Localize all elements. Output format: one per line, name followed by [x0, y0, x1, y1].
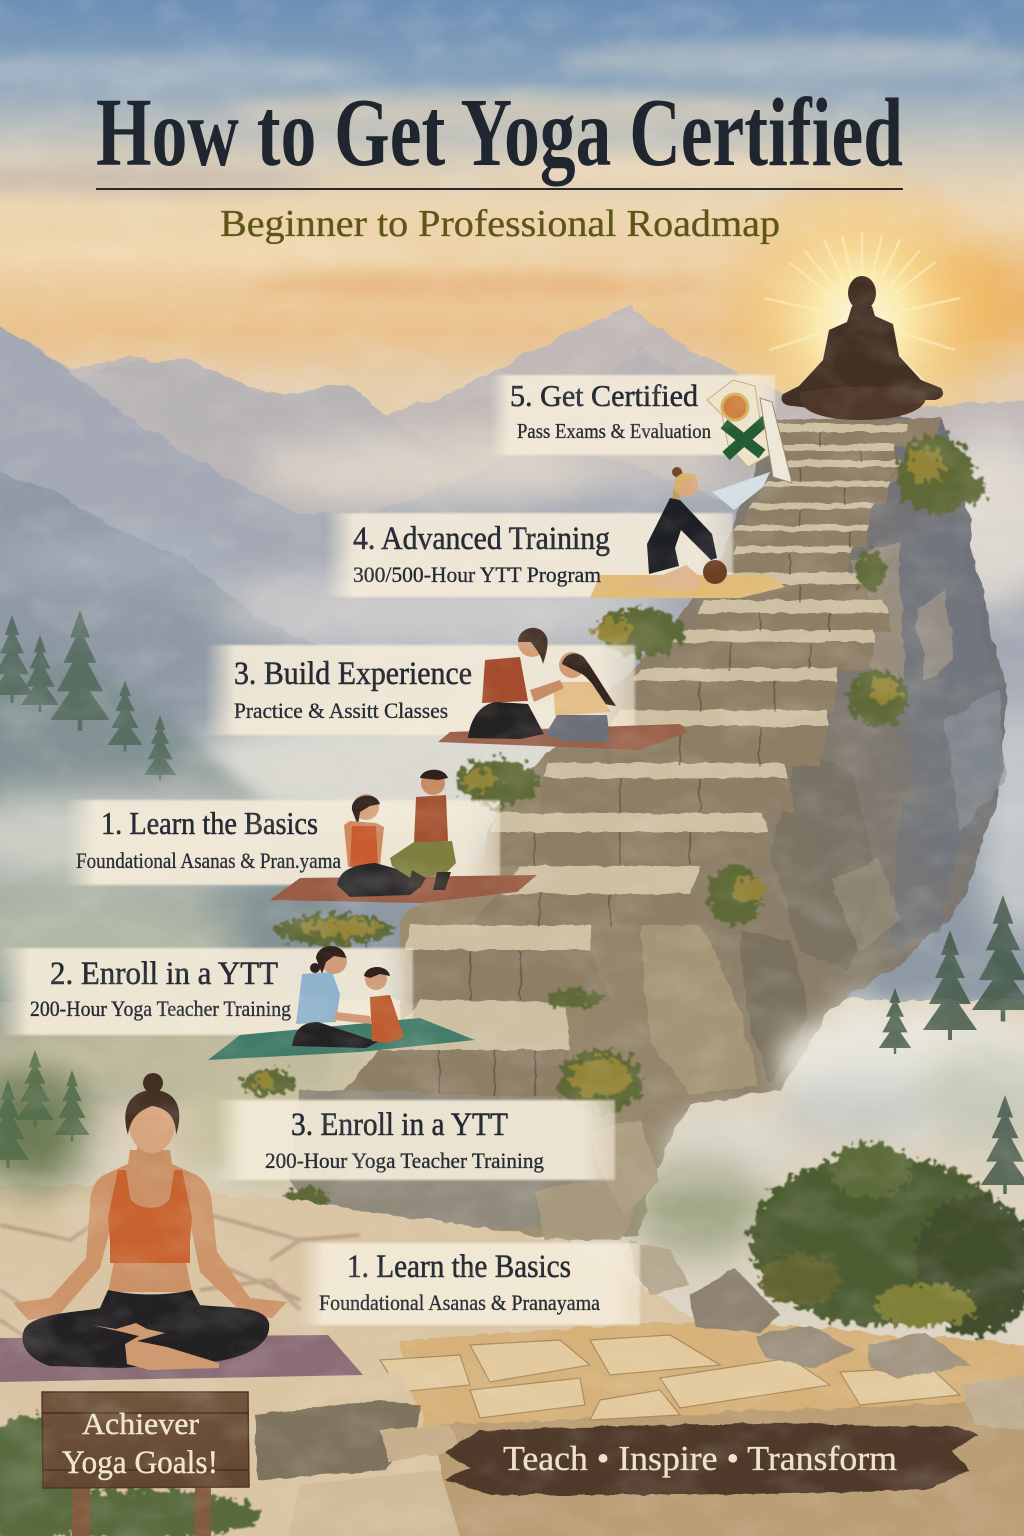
- legs: [22, 1290, 269, 1368]
- shrubs on stairs: [240, 435, 986, 1208]
- cliff: [300, 418, 1008, 1235]
- step 3 banner: [205, 628, 688, 750]
- step 4 banner: 300/500-Hour YTT Program: [353, 562, 601, 587]
- arms: [13, 1172, 287, 1320]
- step 2 banner: [0, 946, 475, 1060]
- sun glow: [702, 160, 1022, 480]
- wooden sign: Achiever: [82, 1406, 200, 1441]
- step 1 upper banner: 1. Learn the Basics: [101, 805, 318, 841]
- step 2 banner: 200-Hour Yoga Teacher Training: [30, 996, 291, 1021]
- cliff rock facets: [640, 520, 1005, 1095]
- step 2 banner: 2. Enroll in a YTT: [50, 956, 278, 992]
- step 3 banner: Practice & Assitt Classes: [234, 698, 448, 723]
- brush banner: [445, 1423, 978, 1495]
- wooden sign: Yoga Goals!: [62, 1445, 218, 1481]
- subtitle: Beginner to Professional Roadmap: [220, 203, 780, 245]
- step 5 banner: Pass Exams & Evaluation: [517, 419, 711, 443]
- feet: [92, 1323, 219, 1370]
- torso skin: [108, 1150, 192, 1292]
- figure: advanced pose: [626, 467, 727, 591]
- figures: teacher and student: [292, 946, 404, 1048]
- step 1 upper banner: [65, 770, 537, 903]
- left-edge foliage: [0, 1050, 260, 1536]
- step 3 lower banner: 3. Enroll in a YTT: [291, 1107, 508, 1143]
- stone staircase: [290, 418, 940, 1240]
- step 1 upper banner: Foundational Asanas & Pran.yama: [76, 848, 341, 873]
- icon: certificate: [707, 380, 792, 483]
- summit meditating silhouette: [781, 276, 943, 420]
- ground path: [0, 1185, 1024, 1536]
- step 3 lower banner: 200-Hour Yoga Teacher Training: [265, 1148, 544, 1173]
- figures: student and instructor: [337, 770, 456, 897]
- wooden sign: [42, 1392, 249, 1536]
- boulders: [250, 1240, 1024, 1480]
- step 4 banner: [325, 467, 785, 598]
- step 4 banner: 4. Advanced Training: [353, 521, 610, 557]
- figures: two women practising: [468, 628, 616, 742]
- left forest and mist: [0, 610, 440, 1190]
- hair: [125, 1090, 179, 1135]
- step 5 banner: 5. Get Certified: [510, 378, 698, 413]
- step 1 lower banner: 1. Learn the Basics: [347, 1249, 571, 1285]
- cliff mist on right: [630, 1005, 1024, 1255]
- yoga mat: [0, 1335, 363, 1382]
- distant mountains: [0, 305, 1024, 1000]
- title rule: [96, 188, 903, 190]
- step 3 banner: 3. Build Experience: [234, 656, 472, 692]
- right pine trees: [879, 895, 1024, 1194]
- step 3 lower banner: [215, 1100, 615, 1180]
- step 5 banner: [490, 375, 792, 483]
- lower-right foliage: [750, 1142, 1024, 1335]
- step 1 lower banner: [300, 1243, 640, 1325]
- foreground meditating woman: [13, 1073, 287, 1370]
- brush banner: Teach • Inspire • Transform: [503, 1439, 897, 1478]
- step 1 lower banner: Foundational Asanas & Pranayama: [319, 1290, 600, 1315]
- neck and face: [136, 1135, 164, 1173]
- orange top: [108, 1170, 192, 1263]
- mountain haze: [0, 430, 1024, 940]
